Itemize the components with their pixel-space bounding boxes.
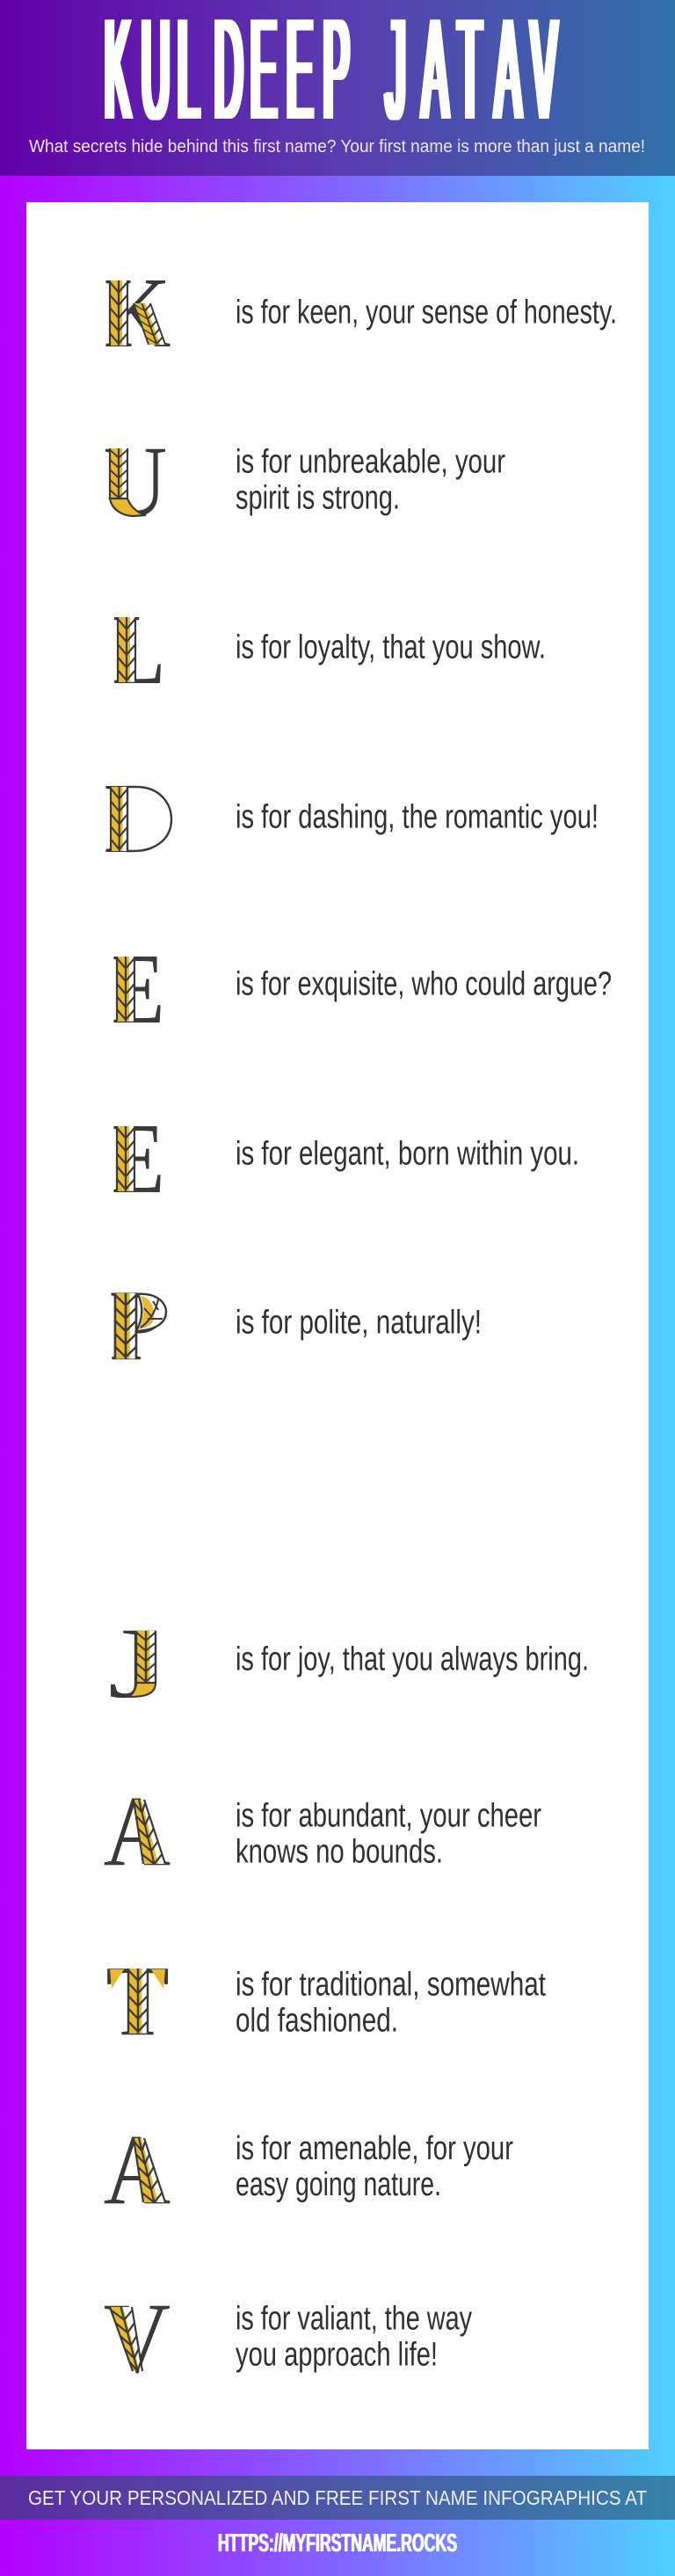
text V: you approach life! [236, 2337, 438, 2374]
icon: letter L: L [112, 593, 166, 705]
text A second: easy going nature. [236, 2166, 441, 2203]
row D [103, 763, 599, 875]
text E second: is for elegant, born within you. [236, 1136, 579, 1173]
row E [111, 934, 612, 1045]
text A: knows no bounds. [236, 1834, 443, 1871]
row E second [111, 1103, 579, 1215]
row V [104, 2282, 472, 2394]
text L: is for loyalty, that you show. [236, 629, 546, 666]
row A [104, 1775, 541, 1887]
text U: is for unbreakable, your [236, 443, 505, 480]
icon: letter A: A [104, 1775, 171, 1887]
subtitle: What secrets hide behind this first name? Your first name is more than just a name! [29, 137, 645, 156]
icon: letter D: D [103, 763, 171, 875]
icon: letter E: E [111, 1103, 165, 1215]
icon: letter E: E [111, 934, 165, 1045]
row A second [104, 2114, 513, 2225]
icon: letter P: P [108, 1270, 166, 1382]
header band [0, 0, 675, 176]
row U [104, 426, 505, 538]
footer band [0, 2476, 675, 2520]
text T: is for traditional, somewhat [236, 1966, 546, 2003]
row T [105, 1945, 546, 2056]
text A second: is for amenable, for your [236, 2130, 513, 2167]
icon: letter A: A [104, 2114, 171, 2225]
row K [103, 258, 617, 369]
icon: letter J: J [108, 1606, 159, 1719]
row L [112, 593, 546, 705]
text U: spirit is strong. [236, 480, 400, 517]
row J [108, 1606, 589, 1719]
text V: is for valiant, the way [236, 2300, 472, 2337]
icon: letter K: K [103, 258, 171, 369]
text P: is for polite, naturally! [236, 1305, 482, 1342]
icon: letter V: V [104, 2282, 171, 2394]
text A: is for abundant, your cheer [236, 1797, 541, 1834]
footer url: HTTPS://MYFIRSTNAME.ROCKS [218, 2529, 457, 2558]
text T: old fashioned. [236, 2003, 398, 2040]
icon: letter T: T [105, 1945, 170, 2056]
row P [108, 1270, 482, 1382]
icon: letter U: U [104, 426, 167, 538]
